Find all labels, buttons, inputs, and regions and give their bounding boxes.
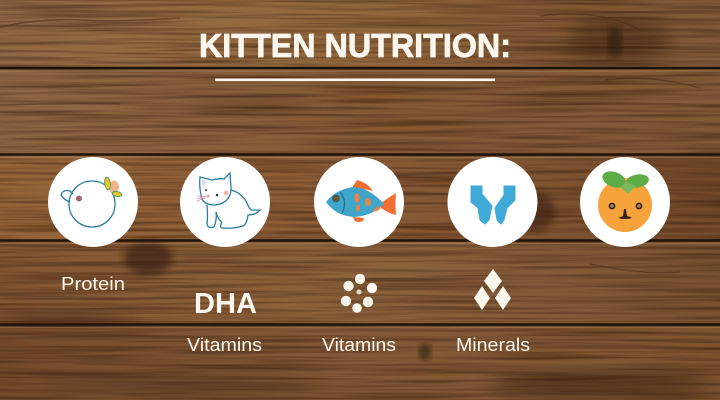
label: Vitamins (first): Vitamins (187, 335, 262, 355)
label: Minerals: Minerals (456, 335, 530, 355)
label: DHA: DHA (194, 288, 257, 320)
icon: fish (314, 157, 404, 247)
icon: kitten (180, 157, 270, 247)
icon: vitamin cluster (341, 274, 377, 313)
icon: protein creature (48, 157, 138, 247)
label: Vitamins (second): Vitamins (322, 335, 396, 355)
label: Protein: Protein (61, 274, 125, 294)
icon: mineral diamonds (474, 269, 511, 310)
icon: orange fruit (580, 157, 670, 247)
title: KITTEN NUTRITION: (199, 27, 511, 64)
title underline (215, 78, 495, 81)
icon: blue shapes (448, 157, 538, 247)
